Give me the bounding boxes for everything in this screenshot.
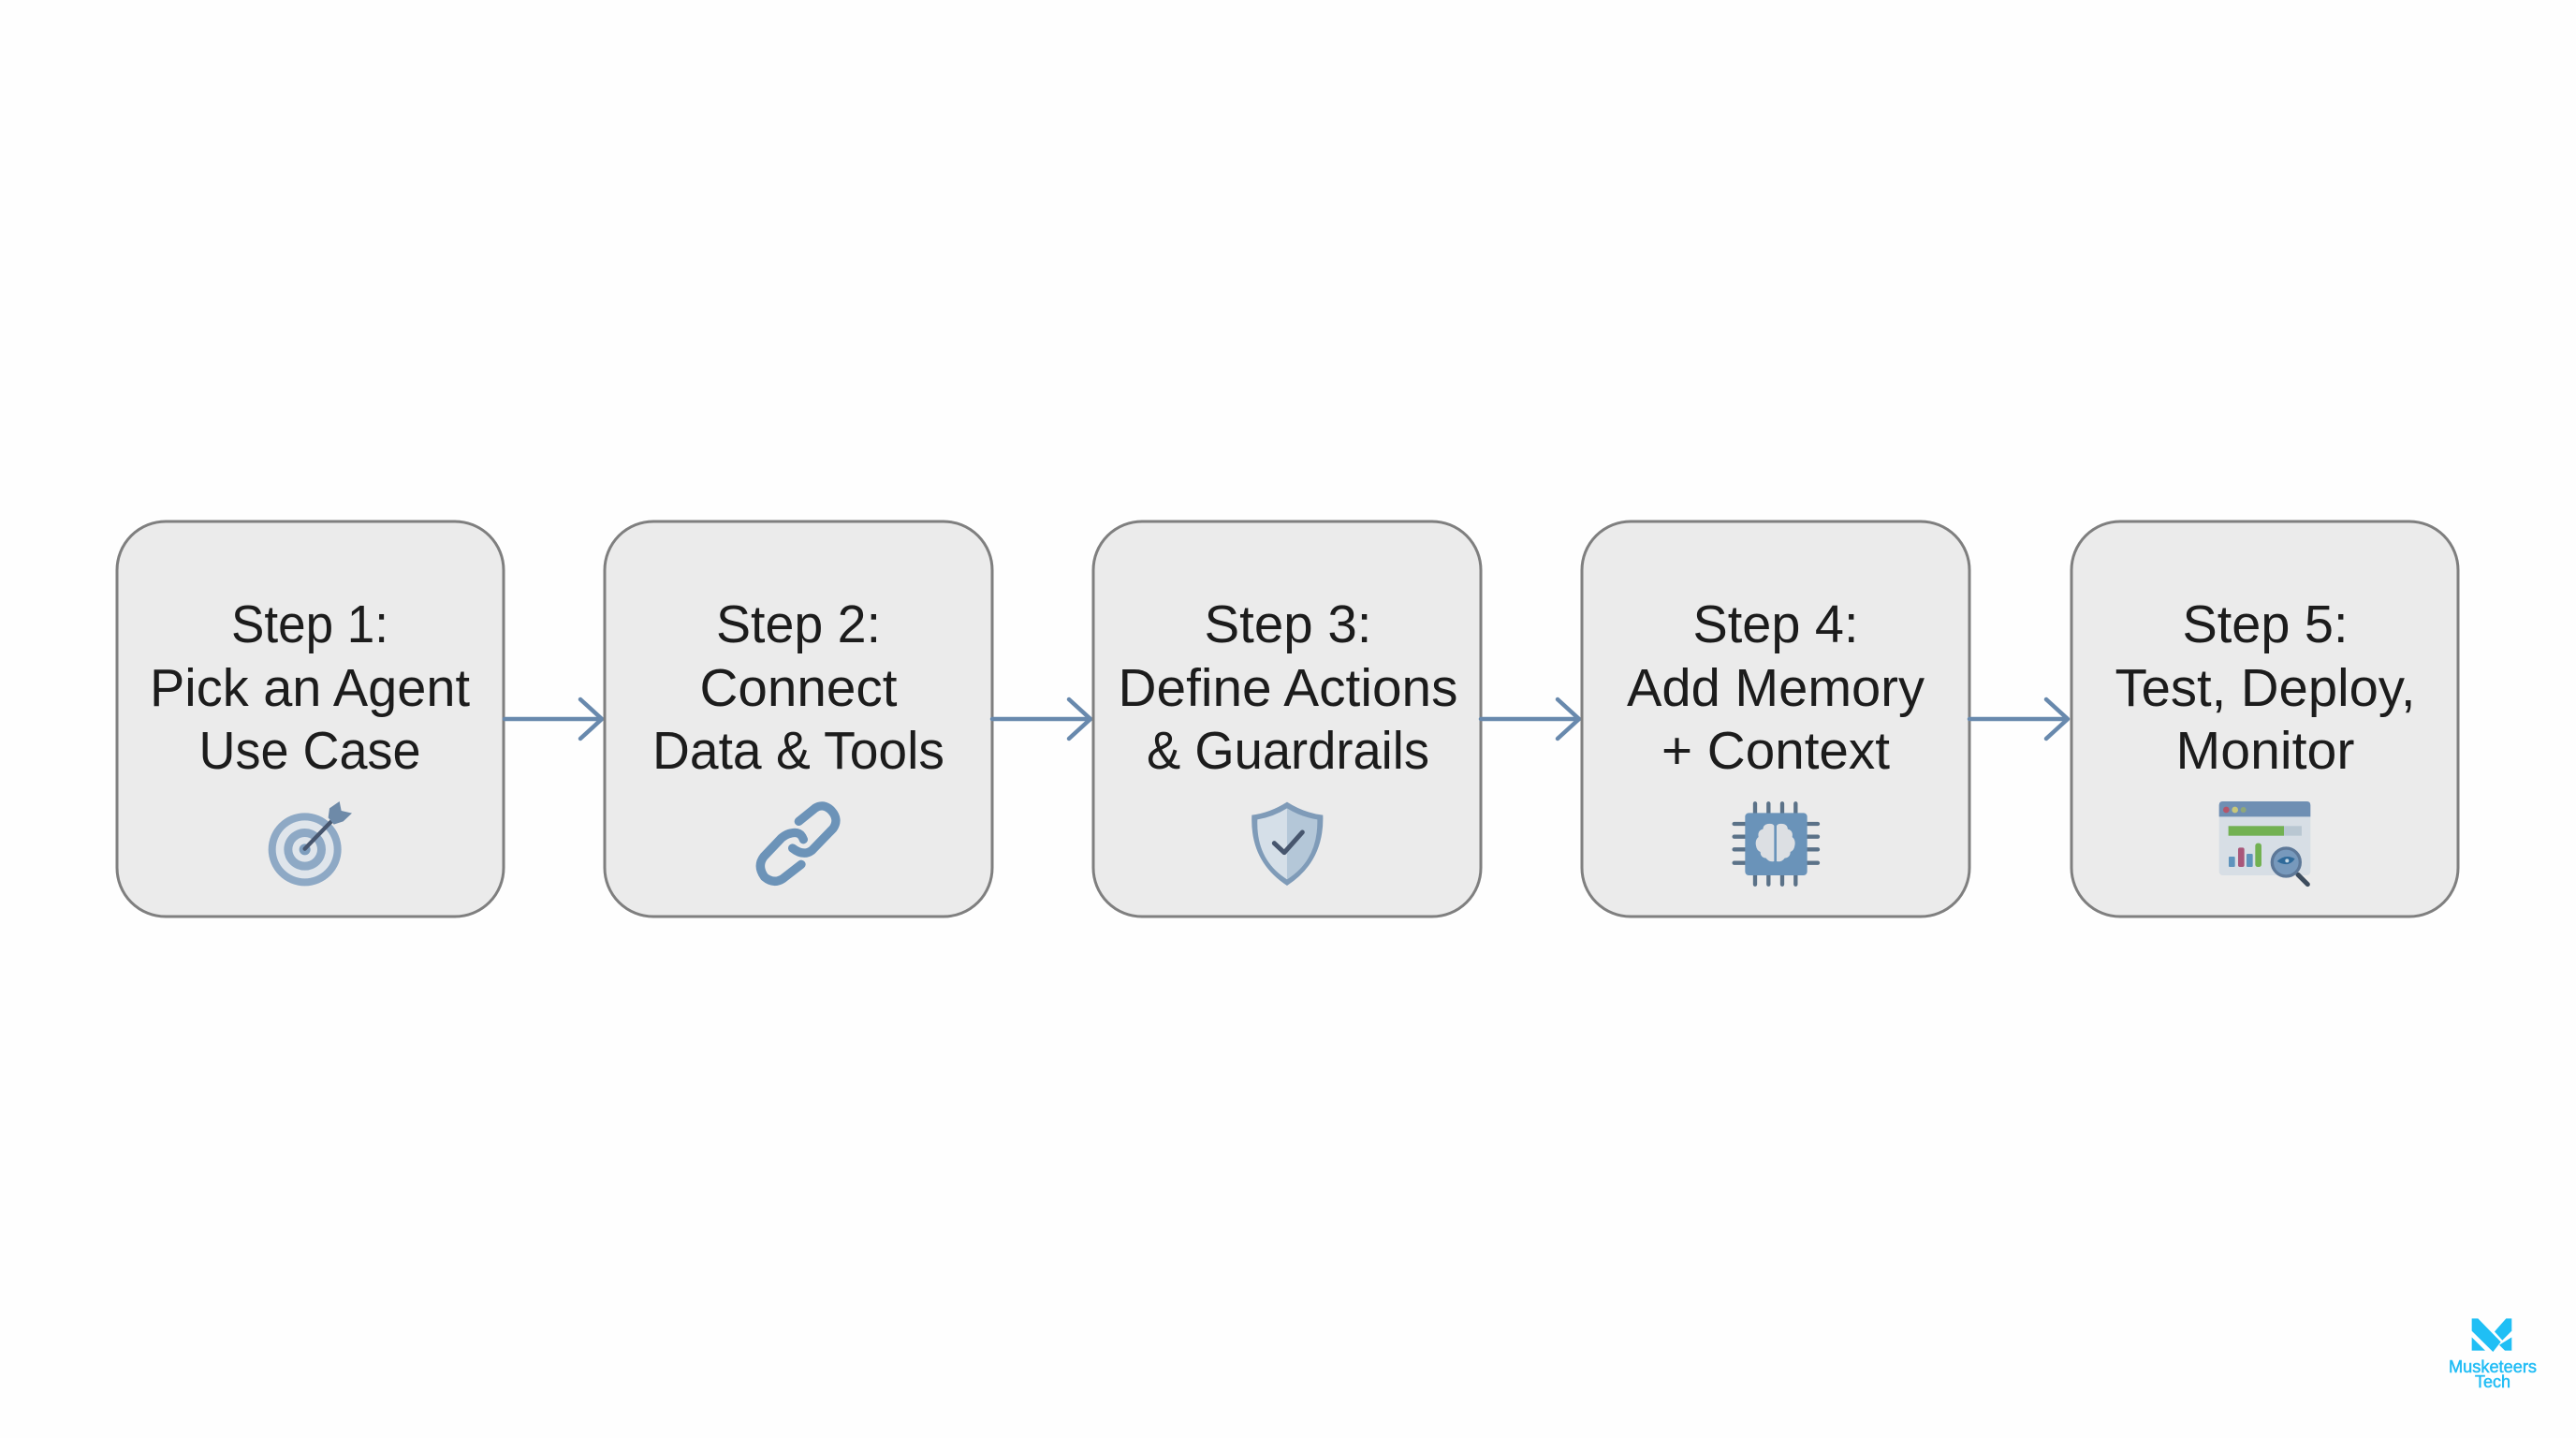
icon: chain link [760, 806, 836, 881]
icon: chip with brain [1734, 803, 1818, 885]
text: step 2 label: Data & Tools [652, 721, 944, 780]
icon: M mark [2472, 1318, 2511, 1352]
text: step 5 label: Step 5: [2183, 594, 2348, 653]
panel: step 1 [117, 521, 504, 917]
text: step 4 label: Step 4: [1692, 594, 1859, 653]
arrow: step 2 to 3 [992, 699, 1090, 739]
text: step 3 label: Define Actions [1118, 658, 1458, 717]
text: step 1 label [150, 594, 470, 780]
panel: step 2 [605, 521, 992, 917]
arrow: step 3 to 4 [1481, 699, 1579, 739]
icon: dashboard with magnifier [2219, 801, 2310, 885]
text: step 5 label [2115, 594, 2415, 780]
text: step 5 label: Monitor [2175, 721, 2355, 780]
text: step 3 label: Step 3: [1204, 594, 1372, 653]
text: step 2 label: Step 2: [716, 594, 881, 653]
panel: step 5 [2071, 521, 2458, 917]
logo: Musketeers Tech [2449, 1318, 2537, 1391]
arrow: step 4 to 5 [1969, 699, 2068, 739]
text: step 4 label: Add Memory [1627, 658, 1925, 717]
logo: Musketeers Tech: Tech [2475, 1372, 2510, 1391]
icon: target with dart [269, 801, 352, 886]
text: step 4 label [1627, 594, 1925, 780]
text: step 3 label: & Guardrails [1147, 721, 1429, 780]
text: step 3 label [1118, 594, 1458, 780]
text: brand name: Musketeers [2449, 1357, 2537, 1376]
text: step 5 label: Test, Deploy, [2115, 658, 2415, 717]
text: step 2 label [652, 594, 944, 780]
icon: shield with check [1251, 802, 1323, 886]
text: step 4 label: + Context [1661, 721, 1890, 780]
text: step 2 label: Connect [700, 658, 898, 717]
text: step 1 label: Pick an Agent [150, 658, 470, 717]
panel: step 4 [1582, 521, 1969, 917]
text: step 1 label: Use Case [198, 721, 421, 780]
panel: step 3 [1093, 521, 1481, 917]
text: step 1 label: Step 1: [231, 594, 388, 653]
arrow: step 1 to 2 [505, 699, 602, 739]
